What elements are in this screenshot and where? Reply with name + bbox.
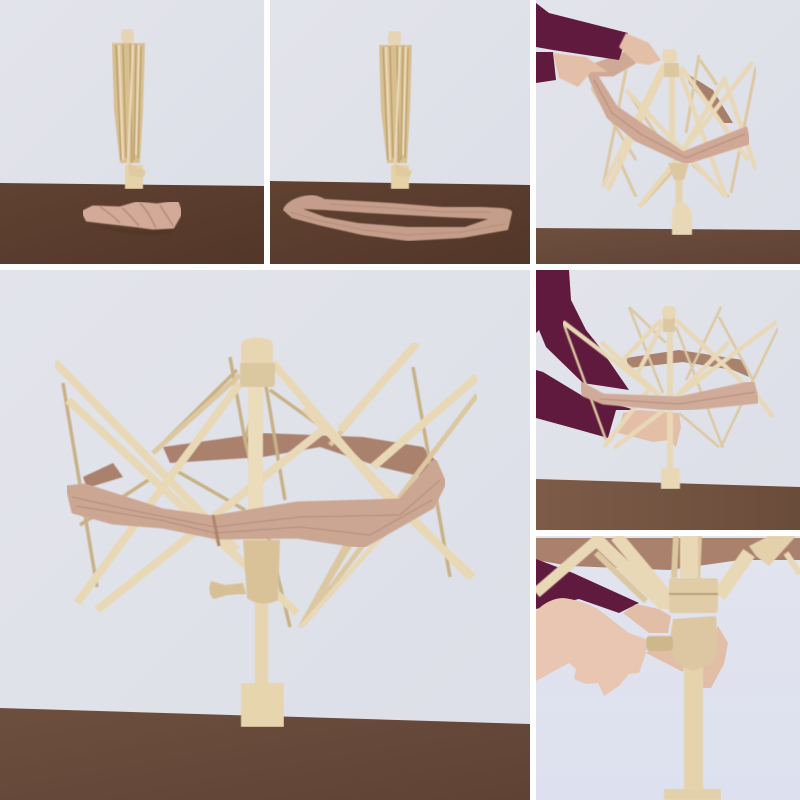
yarn: [586, 50, 749, 163]
hands behind knob: [623, 604, 728, 688]
panel: large open swift with yarn: [0, 270, 530, 800]
central pole and hub: [209, 338, 284, 727]
panel: folded swift with twisted skein: [0, 0, 264, 264]
back yarn: [83, 433, 435, 488]
yarn loop: [283, 195, 512, 241]
table: [536, 479, 800, 530]
yarn: [581, 382, 758, 410]
folded swift: [379, 31, 412, 189]
swift arms: [55, 343, 477, 628]
folded swift: [112, 29, 146, 189]
sleeve: [536, 3, 628, 83]
table: [536, 228, 800, 264]
yarn on top: [536, 538, 800, 570]
back yarn: [626, 350, 749, 377]
swift arms: [536, 536, 800, 609]
hub, knob and pole: [646, 578, 721, 800]
sleeve: [536, 559, 639, 613]
table: [0, 183, 264, 264]
panel: hand turning swift: [536, 270, 800, 530]
main hand: [536, 598, 646, 696]
panel: folded swift with opened skein: [270, 0, 530, 264]
sleeve: [536, 270, 636, 438]
hand: [618, 410, 681, 447]
back yarn: [686, 73, 733, 123]
table: [270, 181, 530, 264]
swift: [591, 49, 756, 235]
front yarn: [67, 460, 445, 547]
table: [0, 708, 530, 800]
panel: placing yarn on open swift: [536, 0, 800, 264]
panel: closeup of hand tightening knob: [536, 536, 800, 800]
yarn skein: [83, 202, 181, 235]
swift: [563, 306, 778, 489]
hands: [553, 33, 661, 87]
